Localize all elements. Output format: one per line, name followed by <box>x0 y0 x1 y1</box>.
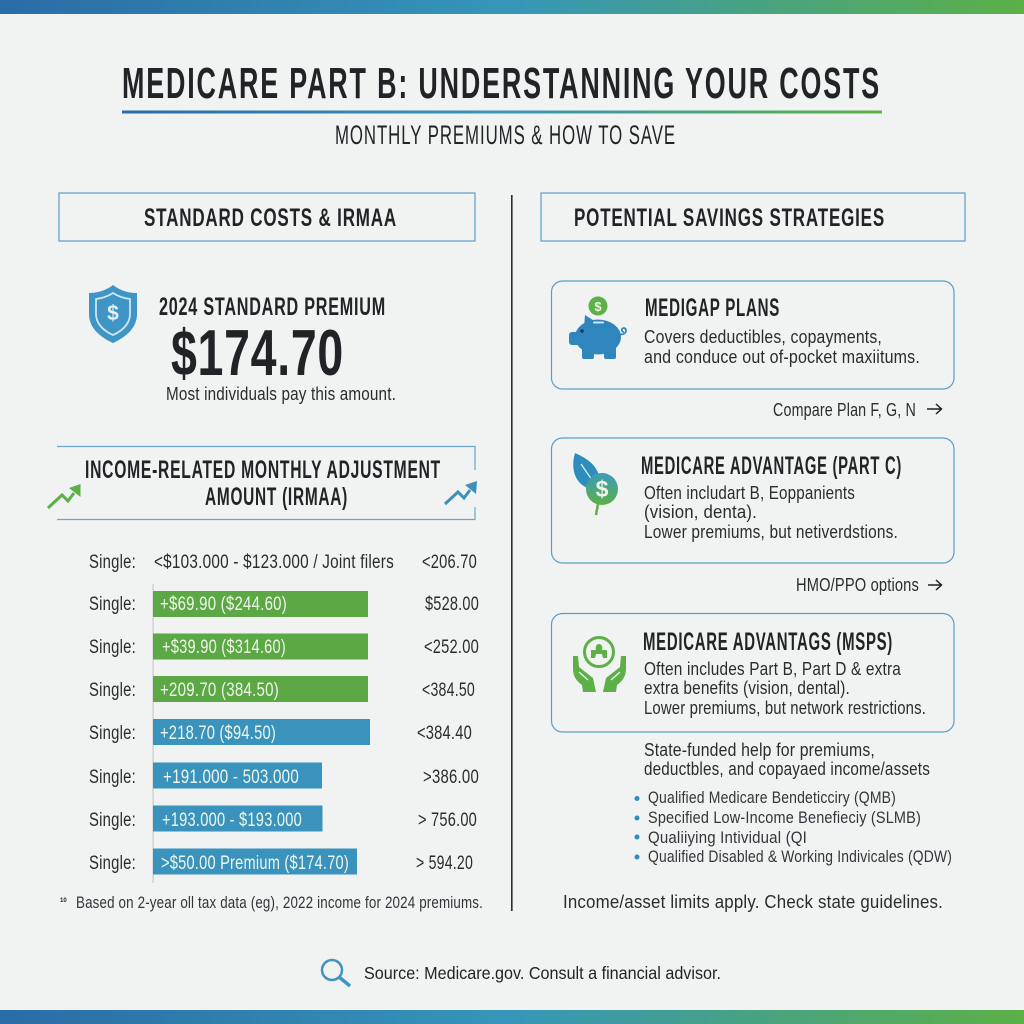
heading: standard costs <box>59 193 475 241</box>
footer source: Source: Medicare.gov. Consult a financial advisor. <box>364 963 721 983</box>
link: HMO/PPO options: HMO/PPO options <box>796 575 919 595</box>
row 7: > 756.00 <box>418 810 477 831</box>
card body: Covers deductibles, copayments, <box>644 327 882 347</box>
icon: blue trend arrow <box>445 481 477 504</box>
heading: savings strategies: POTENTIAL SAVINGS STRATEGIES <box>574 204 885 232</box>
row 7 <box>89 806 477 832</box>
link: compare plans: Compare Plan F, G, N <box>773 400 916 420</box>
arrow <box>927 404 942 414</box>
heading: savings strategies <box>541 193 965 241</box>
text: state-funded help <box>644 740 930 779</box>
row 1: <206.70 <box>422 552 477 573</box>
row 3 <box>89 634 479 660</box>
row 6 <box>89 762 479 788</box>
premium label: 2024 STANDARD PREMIUM <box>159 293 386 321</box>
list: savings programs: Qualified Medicare Bendeticciry (QMB) <box>648 789 896 807</box>
icon: leaf with dollar coin <box>573 453 618 515</box>
row 5: <384.40 <box>417 723 472 744</box>
row 5: +218.70 ($94.50) <box>160 723 276 744</box>
row 2: $528.00 <box>425 594 479 615</box>
row 8: >$50.00 Premium ($174.70) <box>161 853 349 874</box>
card body: Lower premiums, but network restrictions. <box>644 698 926 718</box>
row 5: Single: <box>89 723 136 744</box>
row 4: Single: <box>89 680 136 701</box>
text: state-funded help: deductbles, and copayaed income/assets <box>644 759 930 779</box>
row 4 <box>89 676 475 702</box>
list: savings programs: Qualified Disabled & Working Indivicales (QDW) <box>648 848 952 866</box>
card body: extra benefits (vision, dental). <box>644 678 850 698</box>
icon: piggy bank with coin <box>569 296 626 359</box>
title underline <box>122 110 882 114</box>
icon: piggy bank with coin: $ <box>594 299 602 314</box>
row 4: +209.70 (384.50) <box>160 680 279 701</box>
icon: magnifying glass <box>322 960 350 986</box>
panel: medicare advantage MSPs <box>552 614 954 732</box>
icon: shield with dollar: $ <box>107 302 119 325</box>
panel: medicare advantage part C <box>552 438 954 563</box>
arrow <box>928 580 942 590</box>
card body <box>644 483 898 542</box>
row 5 <box>89 719 472 745</box>
card body: (vision, denta). <box>644 502 757 522</box>
list: savings programs: Qualiiying Intividual (QI <box>648 829 807 847</box>
icon: shield with dollar <box>89 285 137 343</box>
row 7: Single: <box>89 810 136 831</box>
icon: hands holding person <box>573 638 626 692</box>
icon: green trend arrow <box>48 484 80 508</box>
list: savings programs: Specified Low-Income Benefieciy (SLMB) <box>648 809 921 827</box>
row 3: Single: <box>89 637 136 658</box>
row 2: +$69.90 ($244.60) <box>160 594 287 615</box>
panel: standard premium <box>89 285 396 404</box>
text: state-funded help: State-funded help for premiums, <box>644 740 875 760</box>
panel: medigap plans <box>552 281 954 389</box>
card body: and conduce out of-pocket maxiitums. <box>644 347 920 367</box>
list: savings programs <box>634 789 952 866</box>
card body <box>644 327 920 367</box>
row 6: +191.000 - 503.000 <box>163 767 299 788</box>
subtitle: MONTHLY PREMIUMS & HOW TO SAVE <box>335 120 676 150</box>
premium amount: $174.70 <box>171 316 344 389</box>
card title: MEDIGAP PLANS <box>645 294 780 322</box>
icon: leaf with dollar coin: $ <box>596 476 609 502</box>
row 8 <box>89 848 473 874</box>
text: limits note: Income/asset limits apply. Check state guidelines. <box>563 892 943 912</box>
footnote: 10 <box>60 898 67 904</box>
column divider <box>511 195 513 911</box>
card body: Often includart B, Eoppanients <box>644 483 855 503</box>
premium note: Most individuals pay this amount. <box>166 384 396 404</box>
row 6: >386.00 <box>423 767 479 788</box>
heading: standard costs: STANDARD COSTS & IRMAA <box>144 204 397 232</box>
card body: Often includes Part B, Part D & extra <box>644 659 902 679</box>
top gradient bar <box>0 0 1024 14</box>
panel: IRMAA heading: AMOUNT (IRMAA) <box>205 483 348 511</box>
footer source <box>322 960 721 986</box>
row 1: Single: <box>89 552 136 573</box>
row 4: <384.50 <box>422 680 475 701</box>
row 3: <252.00 <box>424 637 479 658</box>
row 3: +$39.90 ($314.60) <box>162 637 286 658</box>
card body: Lower premiums, but netiverdstions. <box>644 522 898 542</box>
card body <box>644 659 926 718</box>
row 7: +193.000 - $193.000 <box>162 810 302 831</box>
row 1: <$103.000 - $123.000 / Joint filers <box>154 552 394 573</box>
row 2: Single: <box>89 594 136 615</box>
bottom gradient bar <box>0 1010 1024 1024</box>
panel: IRMAA heading: INCOME-RELATED MONTHLY ADJUSTMENT <box>85 456 441 484</box>
bar chart: IRMAA tiers <box>89 552 479 883</box>
row 2 <box>89 591 479 617</box>
footnote: Based on 2-year oll tax data (eg), 2022 income for 2024 premiums. <box>76 894 483 912</box>
row 8: > 594.20 <box>416 853 473 874</box>
row 6: Single: <box>89 767 136 788</box>
row 8: Single: <box>89 853 136 874</box>
panel: IRMAA heading <box>48 446 477 520</box>
